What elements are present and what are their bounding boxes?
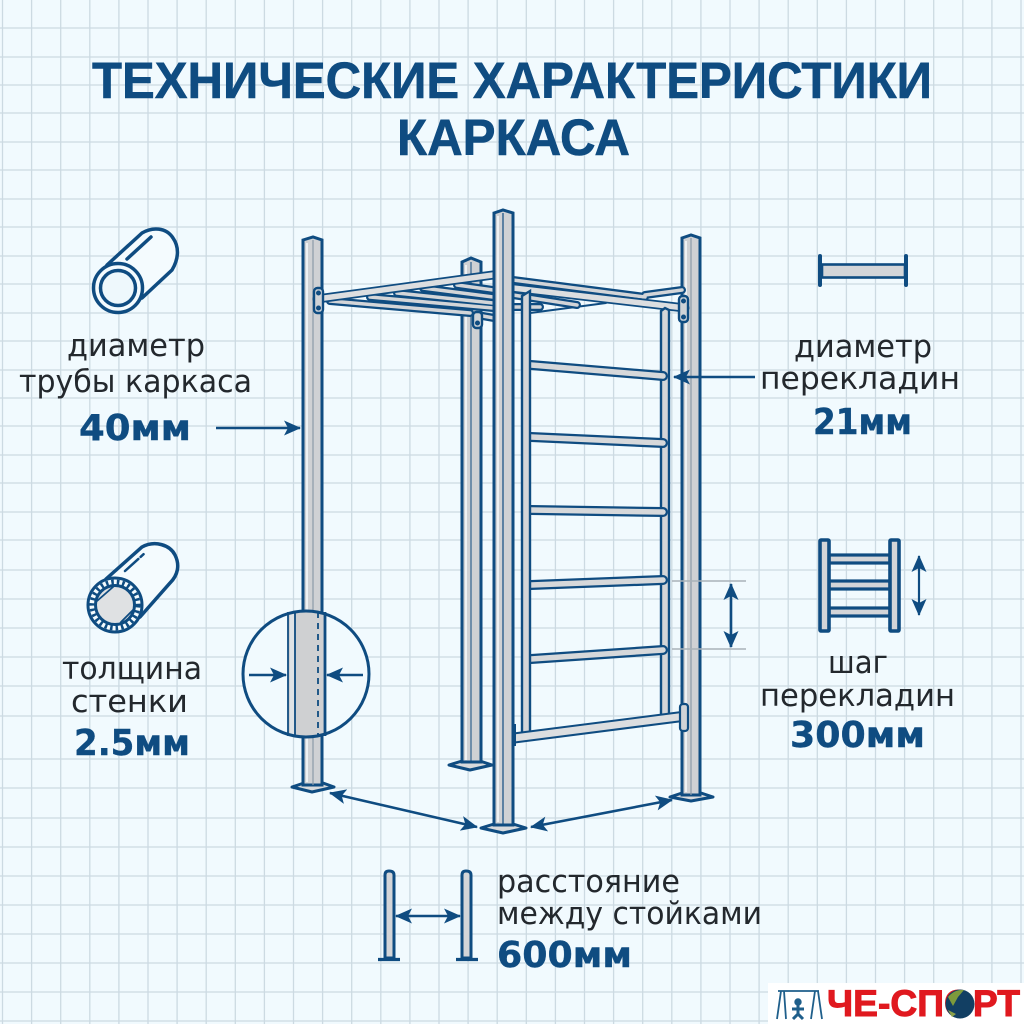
front post [481, 210, 526, 833]
text: rung step: перекладин [760, 678, 955, 714]
title: КАРКАСА [397, 109, 630, 166]
text: wall thickness [62, 651, 202, 764]
text: pipe diameter: диаметр [67, 328, 205, 364]
title [92, 52, 932, 166]
text: post spacing: расстояние [497, 864, 680, 900]
text: wall thickness: 2.5мм [74, 723, 190, 764]
logo: ЧЕ-СПОРТ [827, 983, 1020, 1024]
text: post spacing [497, 864, 762, 976]
text: pipe diameter [19, 328, 252, 449]
icon: rung step [820, 540, 919, 631]
text: wall thickness: толщина [62, 651, 202, 687]
ladder left rail [522, 291, 530, 735]
icon: wall thickness pipe [88, 544, 178, 632]
arrow: pipe diameter pointer [216, 427, 300, 429]
text: rung diameter: 21мм [813, 402, 912, 443]
icon: rung diameter [820, 256, 906, 285]
back post [449, 258, 492, 770]
text: wall thickness: стенки [71, 684, 188, 720]
icon: post spacing [378, 871, 478, 960]
icon: globe [946, 990, 974, 1018]
text: rung diameter: диаметр [794, 329, 932, 365]
left post [292, 237, 334, 792]
right post [670, 235, 713, 801]
title: ТЕХНИЧЕСКИЕ ХАРАКТЕРИСТИКИ [92, 52, 932, 109]
text: rung diameter [760, 329, 960, 443]
overhead bars [317, 275, 685, 318]
text: post spacing: между стойками [497, 896, 762, 932]
text: rung step: 300мм [790, 715, 925, 756]
ladder bottom bar [513, 704, 688, 746]
arrow: rung diameter pointer [674, 376, 755, 378]
text: rung step [760, 645, 955, 756]
arrow: front to right post spacing [531, 800, 672, 827]
dimension: rung step [672, 581, 746, 649]
text: pipe diameter: 40мм [79, 408, 191, 449]
text: rung diameter: перекладин [760, 361, 960, 397]
text: rung step: шаг [828, 645, 888, 681]
arrow: left to front post spacing [330, 793, 477, 827]
rack frame illustration [292, 210, 713, 833]
callout: wall thickness zoom circle [243, 611, 369, 737]
text: post spacing: 600мм [497, 935, 632, 976]
text: pipe diameter: трубы каркаса [19, 364, 252, 400]
brackets [314, 288, 688, 328]
icon: pipe diameter [94, 229, 177, 312]
ladder rungs [531, 365, 663, 659]
icon: swing [777, 991, 822, 1019]
ladder right rail [661, 308, 669, 722]
